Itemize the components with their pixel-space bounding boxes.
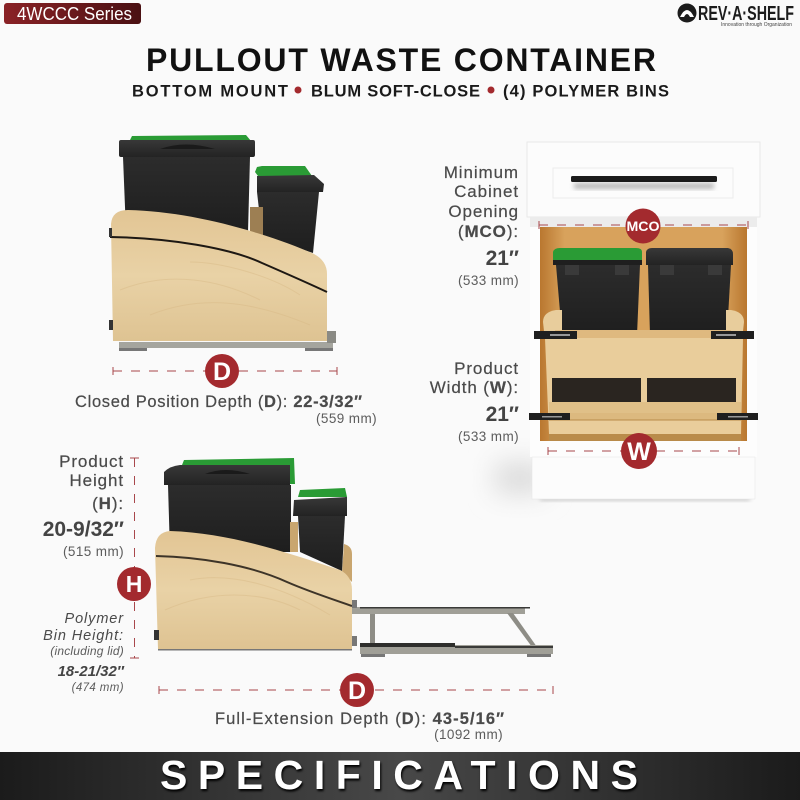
MCO label: (533 mm)	[458, 273, 519, 288]
polymer bin height label	[43, 611, 125, 694]
dimension: full extension depth	[159, 673, 553, 707]
closed depth label: (559 mm)	[316, 411, 377, 426]
height label: 20-9/32″	[43, 518, 124, 541]
brand logo	[678, 3, 794, 28]
grain lines	[165, 578, 330, 615]
closed depth label: Closed Position Depth (D): 22-3/32″	[75, 393, 362, 411]
front view right bin	[646, 248, 733, 335]
product image: cabinet	[495, 142, 760, 501]
floor shadow	[540, 496, 750, 501]
cabinet carcass	[530, 142, 757, 457]
slide rail, closed	[109, 228, 336, 351]
height label: Height	[69, 471, 124, 490]
specifications banner: SPECIFICATIONS	[160, 752, 638, 798]
polymer bin height label: 18-21/32″	[58, 663, 125, 680]
dimension: width	[548, 433, 739, 469]
wood grain	[120, 262, 310, 325]
dimension: width: W	[627, 438, 651, 466]
dimension: closed depth: D	[213, 358, 231, 386]
dimension: MCO	[539, 208, 748, 244]
top shade	[530, 217, 757, 227]
polymer bin height label: Bin Height:	[43, 628, 124, 644]
MCO label: Cabinet	[454, 182, 519, 201]
subtitle	[132, 82, 669, 100]
polymer bin height label: Polymer	[65, 611, 124, 627]
specifications banner	[0, 752, 800, 800]
product width label: (533 mm)	[458, 429, 519, 444]
MCO label: (MCO):	[458, 222, 519, 241]
wood side panel, closed	[111, 210, 327, 341]
height label: Product	[59, 452, 124, 471]
height label: (H):	[92, 494, 124, 513]
small bin, extended	[293, 488, 347, 571]
title: PULLOUT WASTE CONTAINER	[146, 42, 656, 78]
front view left bin	[553, 248, 642, 335]
brand logo: Innovation through Organization	[721, 22, 792, 28]
side groove line	[156, 556, 352, 606]
product width label: Width (W):	[430, 378, 519, 397]
subtitle: (4) POLYMER BINS	[503, 82, 669, 100]
dimension: height: H	[126, 571, 142, 597]
slide brackets	[529, 331, 758, 420]
MCO label: Minimum	[444, 163, 519, 182]
subtitle: BOTTOM MOUNT	[132, 82, 288, 100]
full extension label: Full-Extension Depth (D): 43-5/16″	[215, 710, 504, 728]
full extension label	[215, 710, 504, 742]
polymer bin height label: (474 mm)	[72, 682, 124, 694]
height label: (515 mm)	[63, 544, 124, 559]
small bin, closed	[255, 166, 324, 253]
subtitle: BLUM SOFT-CLOSE	[311, 82, 480, 100]
wood back block	[250, 207, 263, 235]
MCO label: 21″	[486, 247, 519, 270]
cabinet interior	[540, 227, 747, 441]
wood rear block	[290, 522, 352, 582]
MCO label	[444, 163, 519, 288]
product width label: 21″	[486, 403, 519, 426]
height label	[43, 452, 124, 559]
series badge: 4WCCC Series	[17, 4, 132, 24]
pullout front panel	[545, 330, 743, 441]
dimension: full extension depth: D	[348, 677, 366, 705]
product width label: Product	[454, 359, 519, 378]
product image: extended	[154, 458, 553, 657]
fully extended slide rails	[154, 600, 553, 657]
MCO label: Opening	[448, 202, 519, 221]
wood side panel, extended	[155, 531, 352, 649]
full extension label: (1092 mm)	[434, 727, 503, 742]
dimension: closed depth	[113, 354, 337, 388]
closed depth label	[75, 393, 377, 426]
large bin, extended	[164, 458, 295, 552]
dimension: height	[117, 458, 151, 658]
dimension: MCO: MCO	[626, 218, 660, 234]
product width label	[430, 359, 519, 444]
product image: closed position	[109, 135, 336, 351]
bottom edge	[158, 649, 352, 650]
side groove line	[110, 237, 327, 292]
toe kick	[532, 457, 755, 499]
large bin, closed	[119, 135, 255, 232]
cabinet shadow	[495, 462, 545, 494]
polymer bin height label: (including lid)	[50, 644, 124, 658]
drawer front	[527, 142, 760, 217]
side cheeks	[543, 310, 562, 331]
